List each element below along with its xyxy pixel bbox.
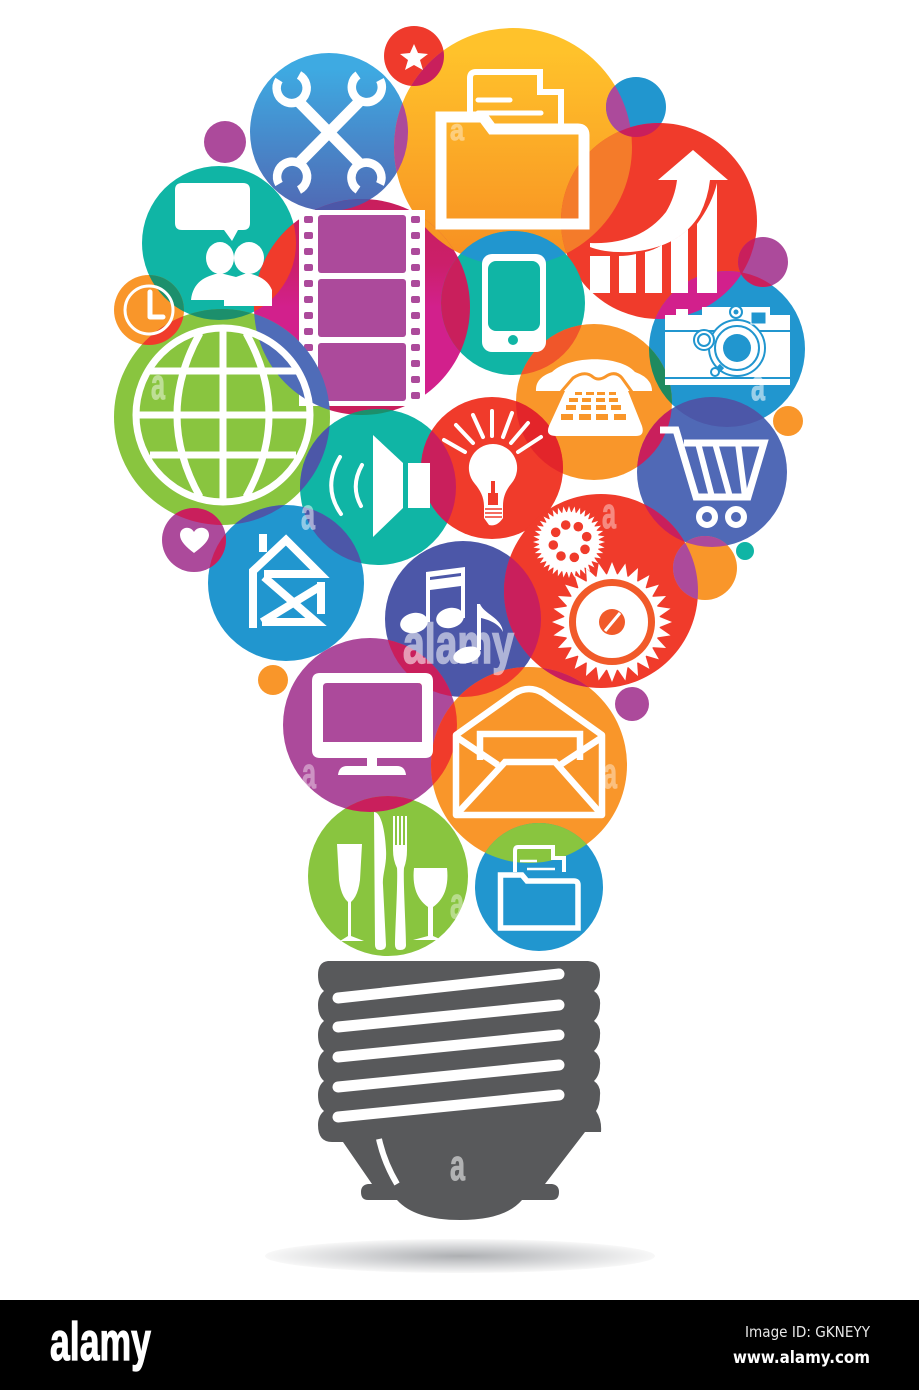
icon: open envelope [456,689,602,815]
icon: gears [533,506,672,682]
footer bar: www.alamy.com [733,1348,870,1368]
icon: crossed wrenches [277,75,382,190]
footer bar [0,1300,919,1390]
watermark: alamy and letter marks: a [450,114,464,147]
icon: people with speech bubble [175,183,272,306]
icon: camera [665,306,790,385]
icon: light bulb with rays [444,411,541,525]
watermark: alamy and letter marks: a [751,361,765,410]
icon: small folder [500,847,578,928]
watermark: alamy and letter marks: alamy [403,612,514,675]
coloured circles of the bulb glass [114,26,805,956]
icon: mobile phone [482,254,546,352]
watermark: alamy and letter marks [151,114,765,928]
watermark: alamy and letter marks: a [302,749,316,798]
small gear [533,506,605,578]
footer bar: alamy [50,1312,151,1372]
icon: folder with papers [441,72,584,224]
large gear [552,562,672,682]
icon: house with envelope [253,534,321,628]
icon: rising bar chart with arrow [590,150,728,293]
icon: globe [136,328,310,502]
watermark: alamy and letter marks: a [301,490,315,539]
watermark: alamy and letter marks: a [603,749,617,798]
icon: desk telephone [536,359,652,436]
bulb screw base [318,961,601,1220]
bulb ground shadow [265,1239,655,1273]
circle overlaps, first layer [114,26,805,951]
icon: music notes [398,567,503,666]
watermark: alamy and letter marks: a [450,879,464,928]
icon: speaker [331,435,430,537]
icon: cutlery and glasses [337,812,447,950]
icon: film strip [299,210,425,406]
bulb screw base: a [450,1141,465,1190]
icon: shopping cart [660,430,764,525]
watermark: alamy and letter marks: a [602,489,616,538]
icon: computer monitor [312,673,433,775]
footer bar: Image ID: GKNEYY [745,1323,871,1341]
circle overlaps, layer over the film strip [254,314,393,492]
icon: heart [180,528,209,553]
watermark: alamy and letter marks: a [151,360,165,409]
icon: star [400,44,428,70]
icon: clock [125,286,173,334]
